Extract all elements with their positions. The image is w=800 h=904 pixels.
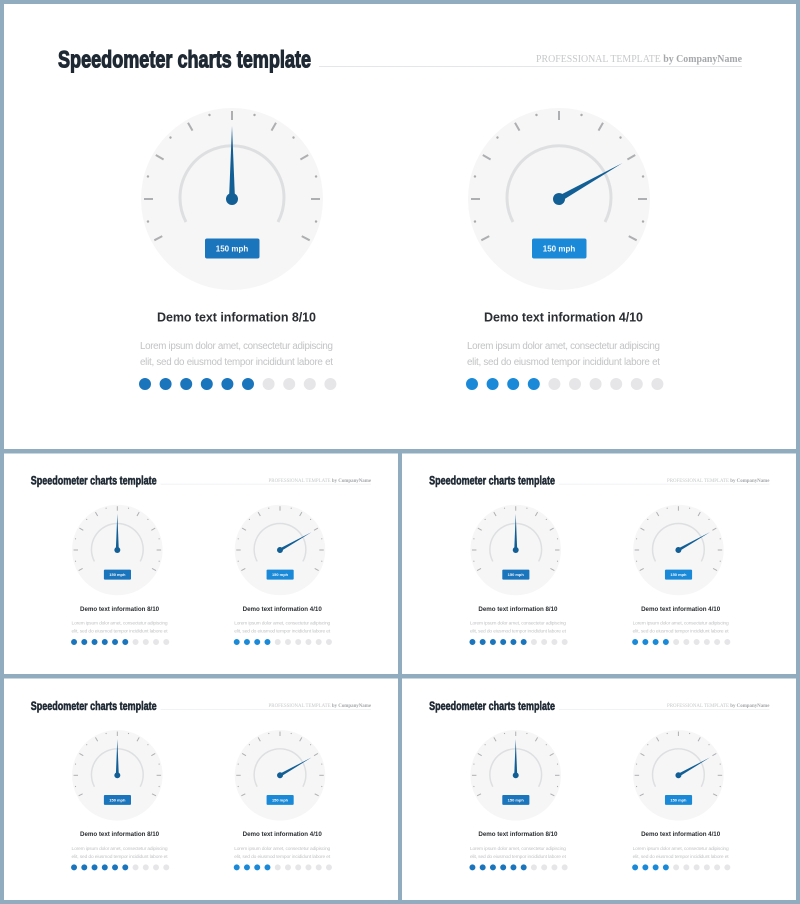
body text right: elit, sed do eiusmod tempor incididunt labore et [234,854,331,860]
body text left [470,621,567,635]
body text left: Lorem ipsum dolor amet, consectetur adipiscing [140,341,333,352]
speed badge: 150 mph [216,244,248,254]
body text left: elit, sed do eiusmod tempor incididunt labore et [140,357,333,368]
header tagline: PROFESSIONAL TEMPLATE by CompanyName [667,703,770,709]
rating dots 4/10 [635,861,727,873]
header tagline: PROFESSIONAL TEMPLATE by CompanyName [536,53,742,65]
speed badge: 150 mph [670,797,687,802]
heading: 8/10: Demo text information 8/10 [478,831,558,838]
body text left: elit, sed do eiusmod tempor incididunt labore et [470,629,567,635]
rating dots 4/10 [237,636,329,648]
title: Speedometer charts template [31,474,157,488]
needle [551,158,625,207]
speed badge [532,238,586,258]
panel: large slide [4,4,796,449]
header rule [559,483,769,485]
speed badge [205,238,260,258]
speed badge: 150 mph [272,572,289,577]
body text right: Lorem ipsum dolor amet, consectetur adipiscing [234,621,331,627]
speed badge: 150 mph [543,244,575,254]
header tagline: PROFESSIONAL TEMPLATE by CompanyName [269,703,372,709]
body text right: elit, sed do eiusmod tempor incididunt labore et [633,854,729,860]
needle [513,514,519,553]
body text left [140,341,333,368]
gauge: 8/10 [72,505,163,595]
rating dots 8/10 [472,861,565,873]
body text right: elit, sed do eiusmod tempor incididunt labore et [633,629,729,635]
speed badge: 150 mph [109,572,126,577]
heading: 8/10: Demo text information 8/10 [80,831,160,838]
body text right: Lorem ipsum dolor amet, consectetur adipiscing [467,341,660,352]
needle [114,514,120,553]
heading: 4/10: Demo text information 4/10 [484,310,643,324]
body text right: Lorem ipsum dolor amet, consectetur adipiscing [633,621,729,627]
body text left [72,621,168,635]
heading: 8/10: Demo text information 8/10 [478,606,558,613]
panel: small slide bottom right [402,678,796,900]
gauge: 8/10 [470,730,561,821]
speed badge: 150 mph [670,572,687,577]
header rule [161,708,371,710]
heading: 4/10: Demo text information 4/10 [641,606,721,613]
gauge: 4/10 [633,730,724,821]
heading: 4/10: Demo text information 4/10 [243,831,322,838]
gauge: 8/10 [141,108,323,290]
body text left: Lorem ipsum dolor amet, consectetur adipiscing [470,621,566,627]
body text left: Lorem ipsum dolor amet, consectetur adipiscing [72,621,168,627]
body text left: elit, sed do eiusmod tempor incididunt labore et [72,854,168,860]
header rule [319,66,742,68]
needle [114,739,120,778]
heading: 4/10: Demo text information 4/10 [641,831,721,838]
title: Speedometer charts template [429,699,555,713]
body text right: Lorem ipsum dolor amet, consectetur adipiscing [234,846,331,852]
rating dots 8/10 [74,861,166,873]
heading: 8/10: Demo text information 8/10 [157,310,316,324]
header rule [559,708,769,710]
rating dots 4/10 [237,861,329,873]
body text left: Lorem ipsum dolor amet, consectetur adipiscing [72,846,168,852]
rating dots 4/10 [472,378,657,390]
body text left: elit, sed do eiusmod tempor incididunt labore et [470,854,567,860]
speed badge: 150 mph [109,797,126,802]
gauge: 4/10 [235,505,325,595]
panel: small slide bottom left [4,678,398,900]
body text right [633,621,729,635]
body text right [467,341,660,368]
body text left [470,846,567,860]
speed badge: 150 mph [508,572,524,577]
body text right [234,846,331,860]
body text right: elit, sed do eiusmod tempor incididunt labore et [467,357,660,368]
needle [674,755,711,779]
panel: small slide top right [402,454,796,674]
gauge: 4/10 [468,108,650,290]
header rule [161,483,371,485]
body text right [234,621,331,635]
body text right: elit, sed do eiusmod tempor incididunt labore et [234,629,331,635]
needle [513,739,519,778]
rating dots 8/10 [145,378,330,390]
speed badge: 150 mph [508,797,524,802]
body text right: Lorem ipsum dolor amet, consectetur adipiscing [633,846,729,852]
heading: 8/10: Demo text information 8/10 [80,606,160,613]
body text left [72,846,168,860]
title: Speedometer charts template [31,699,157,713]
needle [276,755,313,779]
heading: 4/10: Demo text information 4/10 [243,606,322,613]
body text left: Lorem ipsum dolor amet, consectetur adipiscing [470,846,566,852]
body text left: elit, sed do eiusmod tempor incididunt labore et [72,629,168,635]
gauge: 8/10 [72,730,163,821]
gauge: 8/10 [470,505,561,595]
panel: small slide top left [4,454,398,674]
needle [674,530,711,554]
header tagline: PROFESSIONAL TEMPLATE by CompanyName [269,478,372,484]
rating dots 4/10 [635,636,727,648]
title: Speedometer charts template [58,46,311,74]
rating dots 8/10 [472,636,565,648]
gauge: 4/10 [235,730,325,821]
speed badge: 150 mph [272,797,289,802]
body text right [633,846,729,860]
needle [226,126,238,205]
header tagline: PROFESSIONAL TEMPLATE by CompanyName [667,478,770,484]
rating dots 8/10 [74,636,166,648]
title: Speedometer charts template [429,474,555,488]
needle [276,530,313,554]
gauge: 4/10 [633,505,724,595]
